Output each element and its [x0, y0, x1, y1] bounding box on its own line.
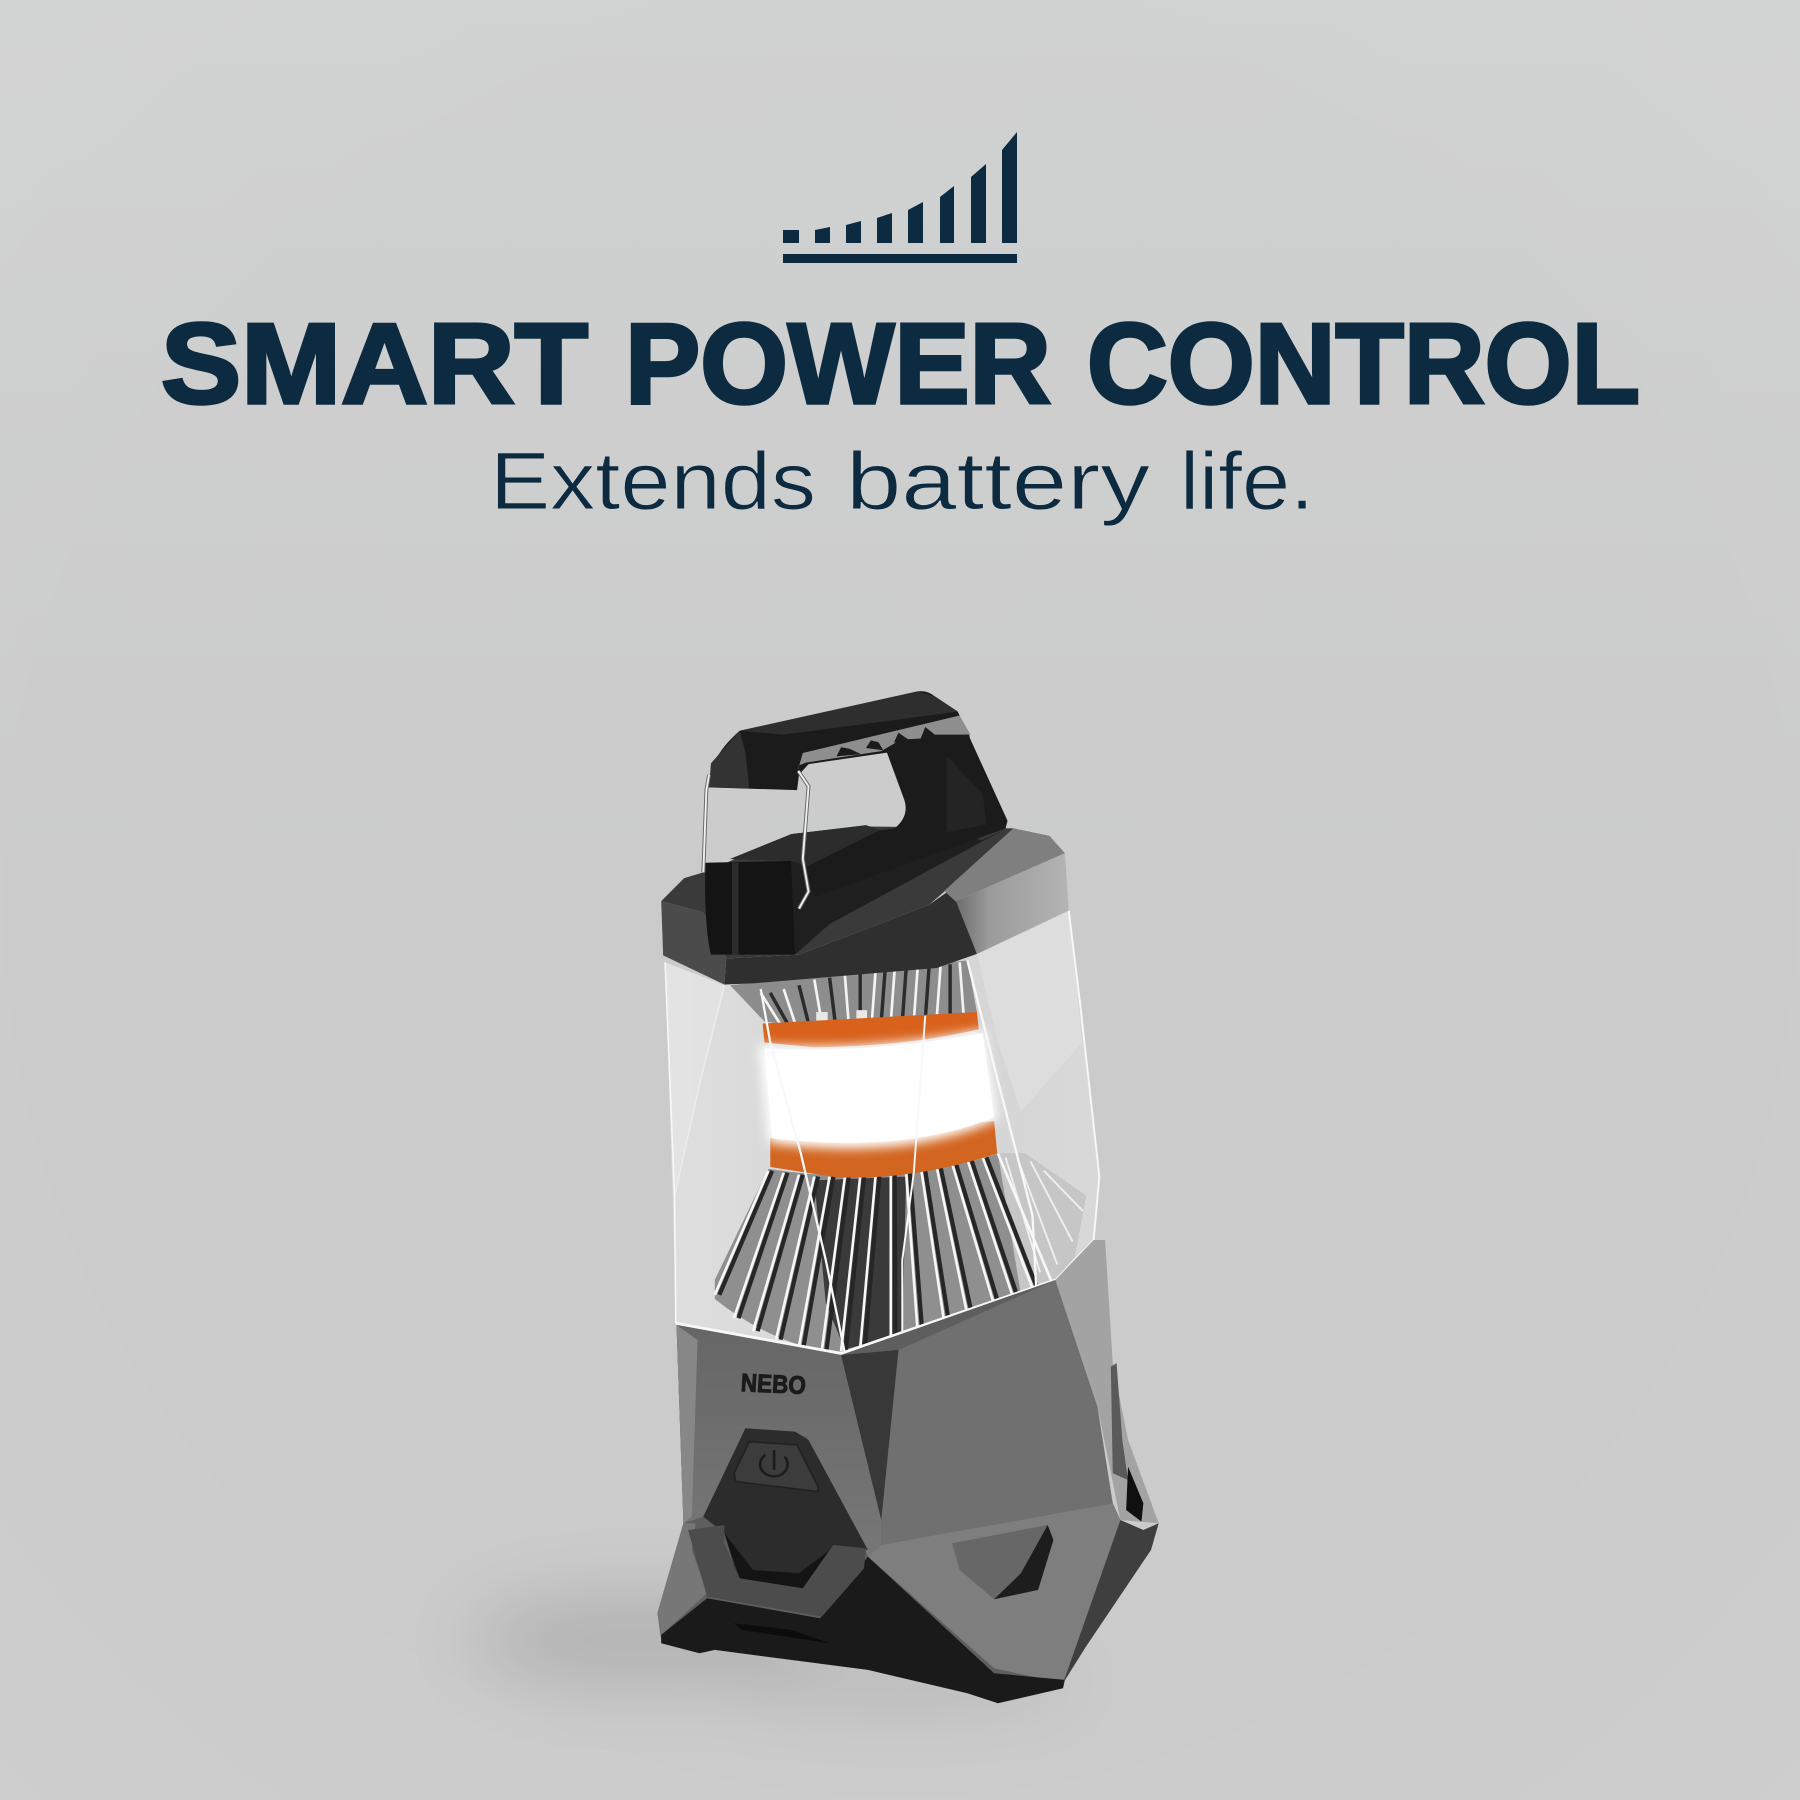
upper heat sink fins	[730, 960, 977, 1027]
lens body	[665, 911, 1099, 1353]
subtitle: Extends	[490, 436, 816, 527]
handle grip and arm	[709, 691, 1008, 897]
subtitle: life.	[1180, 436, 1314, 527]
NEBO logo: NEBO	[740, 1368, 807, 1400]
lens facet edges	[665, 911, 1099, 1353]
lower heat sink fins	[715, 1154, 1086, 1352]
lantern	[657, 691, 1159, 1703]
side slot and port	[1111, 1363, 1143, 1522]
base	[657, 1240, 1159, 1703]
title: SMART	[161, 301, 588, 428]
icon: rising power bars	[783, 132, 1017, 263]
handle base block	[705, 861, 795, 955]
orange rings and lit diffuser	[759, 1012, 998, 1178]
side notch	[952, 1525, 1053, 1599]
lower left facet	[657, 1523, 707, 1635]
top cap	[661, 826, 1069, 984]
left front facet	[677, 1325, 881, 1557]
center dark facet	[841, 1350, 898, 1520]
metal grip strip	[797, 715, 970, 773]
power button	[734, 1442, 818, 1492]
main right facet	[881, 1280, 1113, 1545]
handle slope	[730, 825, 1006, 955]
handle	[703, 691, 1008, 955]
title: POWER	[625, 301, 1051, 428]
floor shadow	[470, 1595, 1070, 1698]
subtitle: battery	[846, 436, 1150, 527]
hex bumper	[688, 1525, 866, 1617]
base silhouette	[657, 1280, 1120, 1700]
title: CONTROL	[1087, 301, 1640, 428]
rear light strip	[1055, 1240, 1159, 1523]
foot slot	[734, 1623, 830, 1643]
front control plate	[703, 1428, 868, 1588]
bottom foot	[661, 1557, 1065, 1703]
lower right facet	[868, 1503, 1120, 1683]
grip teeth	[836, 727, 970, 756]
right textured foot facet	[1063, 1520, 1159, 1683]
title	[161, 301, 1640, 428]
subtitle	[490, 436, 1314, 527]
metal wires	[703, 771, 809, 909]
